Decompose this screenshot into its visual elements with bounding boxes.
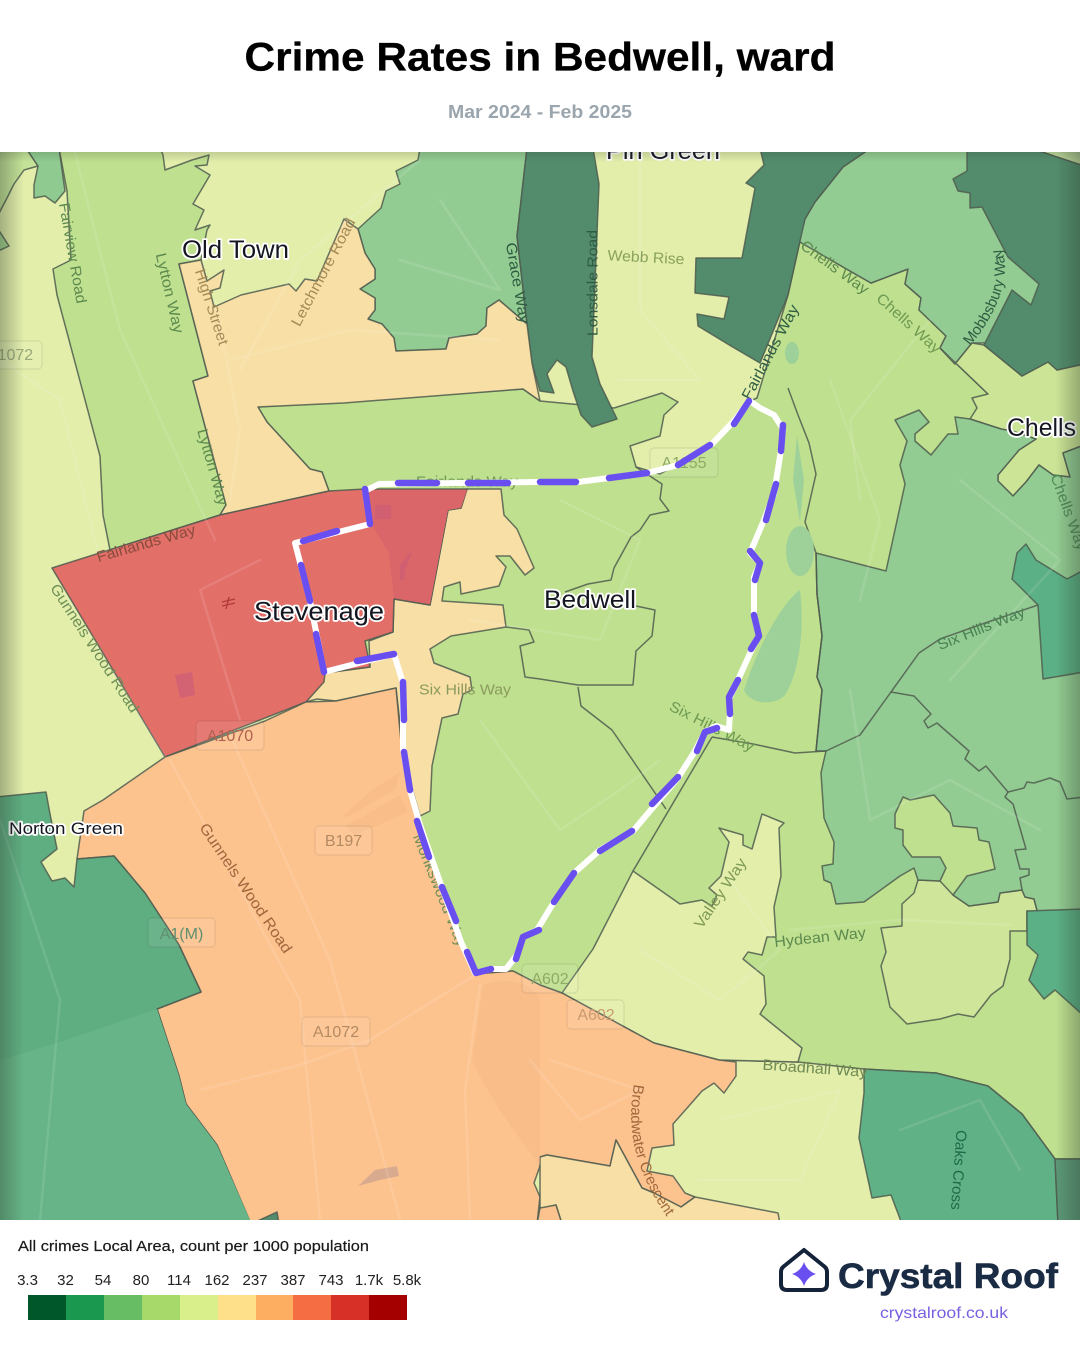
region: Oaks Cross green — [859, 1069, 1058, 1224]
legend values: 237 — [242, 1272, 268, 1289]
map base — [0, 152, 1080, 1220]
road names: Fairlands Way — [95, 521, 198, 566]
legend values — [17, 1272, 422, 1289]
region: mid green east and south-east — [816, 410, 1080, 914]
region: mid green north-east — [800, 152, 1039, 365]
shield: B197: B197 — [325, 833, 362, 850]
place names: Stevenage — [254, 596, 384, 626]
wordmark: Crystal Roof — [838, 1257, 1058, 1296]
website: crystalroof.co.uk — [880, 1305, 1009, 1322]
region: top-left green patch — [26, 148, 65, 203]
region: dark green Grace Way — [517, 148, 617, 427]
shield: A1072 south — [302, 1017, 370, 1046]
road names: Six Hills Way — [419, 681, 512, 698]
region: west edge patch — [0, 231, 10, 251]
region: Hydean pale pocket — [881, 880, 1038, 1024]
region boundaries: Bedwell sub-wards — [506, 388, 826, 871]
legend values: 3.3 — [17, 1272, 38, 1289]
region: pale orange south pocket — [540, 1140, 780, 1224]
place names: Chells — [1007, 414, 1076, 442]
ward boundary route: purple dashes — [301, 401, 783, 973]
legend — [17, 1238, 422, 1320]
railway station symbol — [222, 597, 235, 609]
region: small dark corner — [258, 1211, 280, 1220]
region: Stevenage red — [52, 489, 467, 757]
region: big light green Bedwell and east — [258, 241, 1080, 1159]
road names: Six Hills Way — [935, 603, 1028, 654]
road names: Valley Way — [691, 855, 751, 932]
region: green patch south-east — [1027, 909, 1080, 1016]
shield: A1155: A1155 — [661, 455, 707, 472]
shield: A602 south: A602 — [577, 1007, 615, 1024]
road names: Letchmore Road — [288, 215, 359, 329]
region: top-left light green — [0, 152, 38, 213]
legend values: 743 — [318, 1272, 344, 1289]
road shields — [0, 341, 718, 1046]
region: south orange — [77, 688, 736, 1224]
patch: left green lighter — [156, 1009, 250, 1220]
map edge vignette — [0, 152, 1080, 1220]
logo: Crystal Roof — [781, 1250, 1058, 1322]
road names: Gunnels Wood Road — [46, 581, 142, 716]
shield: A1070 — [196, 721, 264, 750]
parks and lakes — [744, 342, 814, 702]
place names: Bedwell — [544, 586, 636, 614]
place names — [9, 137, 1076, 838]
region: dark green north-east — [953, 148, 1080, 376]
region: Chells light green — [940, 343, 1080, 496]
shield: A1155 — [650, 448, 718, 477]
street network — [0, 153, 1060, 1220]
region: green patch east — [1012, 544, 1080, 679]
road names: Lonsdale Road — [584, 230, 601, 336]
icon: house with star — [781, 1250, 827, 1290]
legend title: All crimes Local Area, count per 1000 population — [18, 1238, 369, 1255]
ward boundary route: white base — [295, 401, 783, 973]
region: orange corner — [537, 1204, 562, 1220]
road names: Fairlands Way — [739, 302, 803, 403]
road names: Oaks Cross — [947, 1129, 970, 1210]
road names — [52, 203, 1080, 1264]
legend values: 5.8k — [393, 1272, 422, 1289]
road names: Webb Rise — [607, 247, 685, 268]
road names: Hydean Way — [773, 924, 867, 951]
road names: Fairview Road — [55, 201, 89, 305]
region: Valley Way yellow pocket — [562, 814, 802, 1062]
shield: A602 south — [567, 1000, 624, 1029]
legend values: 80 — [133, 1272, 149, 1289]
road names: Broadwater Crescent — [631, 1085, 674, 1217]
region: top-right corner — [1043, 152, 1080, 164]
shield: A1072 south: A1072 — [313, 1024, 359, 1041]
place names: Pin Green — [606, 137, 720, 165]
patch: red buildings — [175, 505, 412, 698]
legend values: 32 — [57, 1272, 74, 1289]
road names: Fairlands Way — [416, 473, 519, 490]
road names: Chells Way — [873, 290, 945, 357]
region: mid green north — [358, 148, 527, 351]
legend values: 1.7k — [355, 1272, 384, 1289]
title: Crime Rates in Bedwell, ward — [244, 36, 836, 80]
road names: Grace Way — [502, 241, 533, 326]
road names: Gunnels Wood Road — [196, 820, 295, 957]
patches: orange shading — [539, 1156, 540, 1165]
shield: A1(M): A1(M) — [160, 926, 203, 943]
road names: High Street — [191, 267, 232, 348]
legend colour scale — [28, 1295, 407, 1320]
region boundaries: east mid green wards — [826, 605, 1080, 890]
region: Stevenage centre darker — [367, 490, 467, 604]
region: left green — [0, 792, 251, 1224]
shield: A1070: A1070 — [207, 728, 253, 745]
region: dark green corner — [1055, 1159, 1080, 1224]
legend values: 387 — [280, 1272, 306, 1289]
shield: A1072 west — [0, 341, 42, 369]
region: Fairview band — [53, 148, 226, 550]
region: central pale orange — [306, 489, 534, 816]
legend values: 162 — [204, 1272, 230, 1289]
place names: Norton Green — [9, 819, 123, 838]
road names: Six Hills Way — [666, 698, 757, 756]
region: dark green Fairlands — [695, 148, 871, 363]
legend values: 54 — [95, 1272, 111, 1289]
road names: Broadhall Way — [762, 1057, 868, 1081]
region: Old Town pale orange — [179, 219, 540, 515]
patch: orange pond — [358, 1166, 399, 1186]
road names: Lytton Way — [152, 251, 187, 336]
shield: A1(M) — [148, 918, 215, 947]
road names: Chells Way — [797, 237, 872, 298]
legend values: 114 — [167, 1272, 191, 1289]
road names: Mobbsbury Way — [962, 250, 1006, 345]
shield: A602 north: A602 — [531, 971, 569, 988]
shield: B197 — [315, 826, 372, 855]
place names: Old Town — [182, 236, 289, 264]
road names: Lytton Way — [193, 427, 231, 508]
subtitle: date range: Mar 2024 - Feb 2025 — [448, 101, 632, 122]
road names: Monkswood Way — [409, 831, 470, 950]
shield: A602 north — [522, 964, 578, 993]
